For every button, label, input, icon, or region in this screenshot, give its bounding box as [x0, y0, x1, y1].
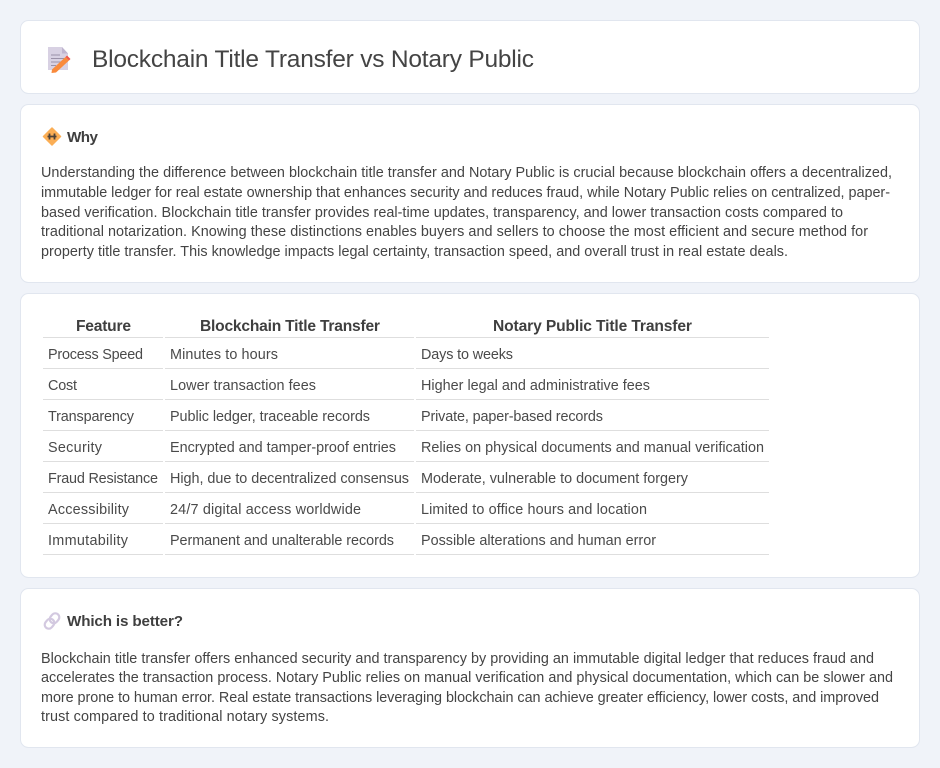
- row: transparency: Transparency: [48, 409, 135, 425]
- text block: why paragraph: traditional notarization. Knowing these distinctions enables buyers and sellers to choose the most efficient and secure method for: [41, 224, 868, 240]
- row: fraud resistance: Moderate, vulnerable to document forgery: [421, 471, 689, 487]
- row: immutability: Permanent and unalterable records: [170, 533, 394, 549]
- row: cost: Cost: [48, 378, 77, 394]
- row: process speed: Minutes to hours: [170, 347, 278, 363]
- heading: which is better: Which is better?: [67, 613, 183, 630]
- row: transparency: Private, paper-based records: [421, 409, 603, 425]
- row: transparency: [48, 409, 603, 425]
- row: security: [48, 440, 764, 456]
- row: fraud resistance: High, due to decentralized consensus: [170, 471, 409, 487]
- row: security: Encrypted and tamper-proof entries: [170, 440, 396, 456]
- text block: which paragraph: [41, 651, 893, 725]
- text block: which paragraph: Blockchain title transfer offers enhanced security and transparency by providing an immutable digital ledger that reduces fraud and: [41, 651, 874, 667]
- text block: which paragraph: more prone to human error. Real estate transactions leveraging blockchain can achieve greater efficiency, lower costs, and improved: [41, 690, 879, 706]
- text block: which paragraph: trust compared to traditional notary systems.: [41, 709, 329, 725]
- icon: document with pencil: [48, 47, 70, 73]
- text block: which paragraph: accelerates the transaction process. Notary Public relies on manual verification and physical documentation, which can be slower and: [41, 670, 893, 686]
- row: accessibility: 24/7 digital access worldwide: [170, 502, 361, 518]
- row: cost: Lower transaction fees: [170, 378, 316, 394]
- panel: which is better: [20, 588, 920, 748]
- row: immutability: Immutability: [48, 533, 129, 549]
- row: immutability: Possible alterations and human error: [421, 533, 656, 549]
- row: security: Security: [48, 440, 103, 456]
- row: accessibility: [48, 502, 647, 518]
- text block: why paragraph: immutable ledger for real estate ownership that enhances security and reduces fraud, while Notary Public relies on centralized, paper-: [41, 185, 890, 201]
- row: transparency: Public ledger, traceable records: [170, 409, 370, 425]
- panel: why: [20, 104, 920, 282]
- table header: Notary Public Title Transfer: [493, 318, 692, 335]
- icon: warning diamond: [44, 128, 60, 145]
- icon: chain link: [43, 612, 61, 630]
- title: Blockchain Title Transfer vs Notary Public: [92, 46, 534, 73]
- text block: why paragraph: [41, 165, 892, 260]
- row: security: Relies on physical documents and manual verification: [421, 440, 764, 456]
- row: process speed: Process Speed: [48, 347, 143, 363]
- text block: why paragraph: Understanding the difference between blockchain title transfer and Notary Public is crucial because blockchain offers a decentralized,: [41, 165, 892, 181]
- row: accessibility: Accessibility: [48, 502, 130, 518]
- text block: why paragraph: property title transfer. This knowledge impacts legal certainty, transaction speed, and overall trust in real estate deals.: [41, 244, 788, 260]
- row: process speed: Days to weeks: [421, 347, 513, 363]
- text block: why paragraph: based verification. Blockchain title transfer provides real-time updates, transparency, and lower transaction costs compared to: [41, 205, 843, 221]
- heading: why: Why: [67, 129, 99, 146]
- row: fraud resistance: [48, 471, 689, 487]
- table header: Feature: [76, 318, 131, 335]
- row: accessibility: Limited to office hours and location: [421, 502, 647, 518]
- row: fraud resistance: Fraud Resistance: [48, 471, 158, 487]
- row: immutability: [48, 533, 656, 549]
- row: cost: Higher legal and administrative fees: [421, 378, 650, 394]
- panel: header: [20, 20, 920, 94]
- table header: Blockchain Title Transfer: [200, 318, 380, 335]
- panel: comparison table: [20, 294, 920, 578]
- row: process speed: [48, 347, 513, 363]
- row: cost: [48, 378, 650, 394]
- table header: [76, 318, 692, 335]
